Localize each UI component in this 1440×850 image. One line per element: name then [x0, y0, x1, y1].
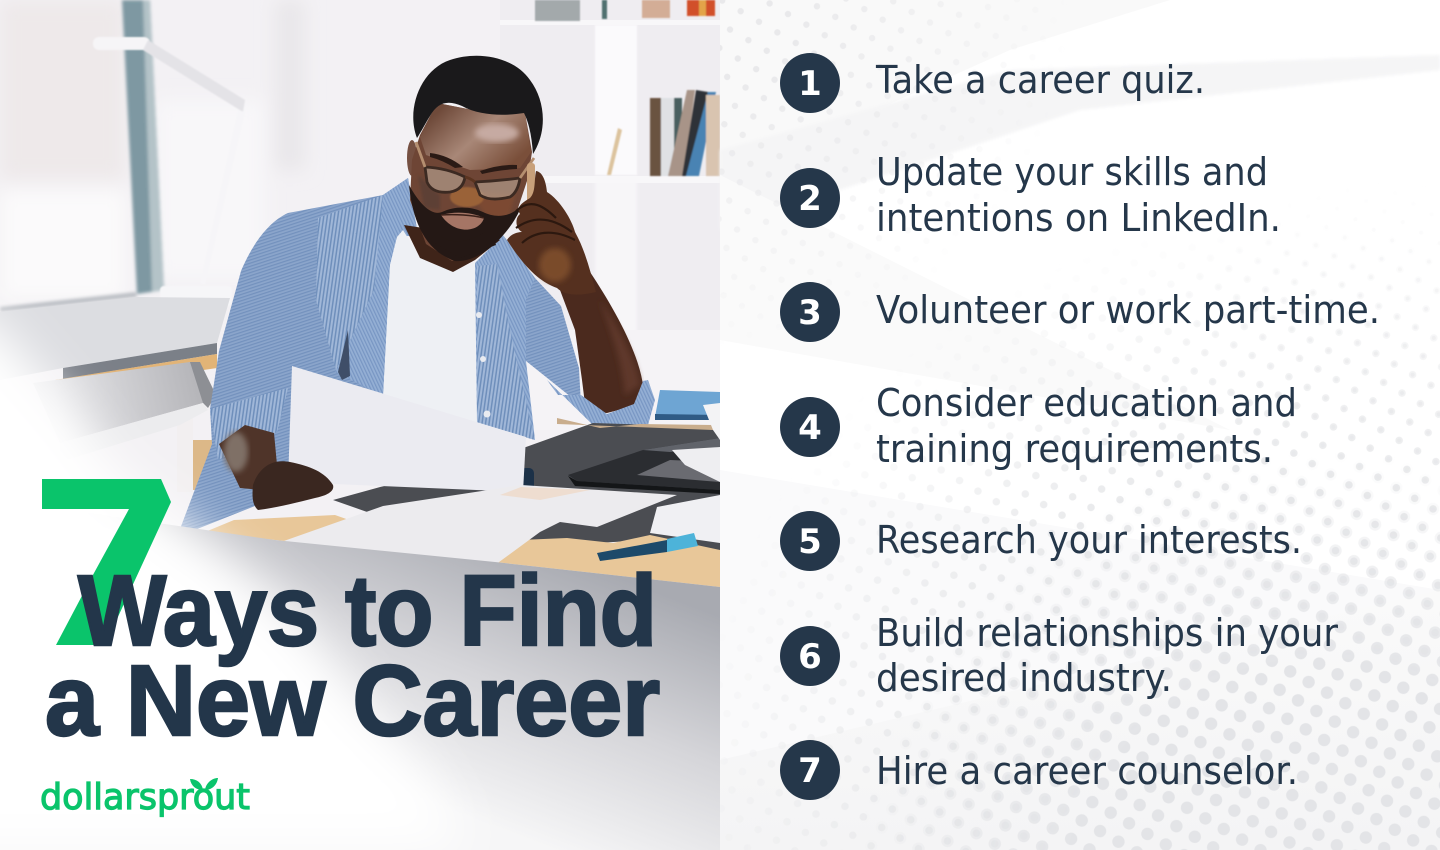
step 1	[780, 53, 1205, 113]
window view	[8, 8, 296, 289]
title line 2: a New Career	[45, 645, 660, 757]
left ear	[407, 140, 417, 176]
cheek	[480, 196, 514, 216]
step 4: Consider education and	[876, 381, 1297, 425]
window frame	[0, 0, 164, 312]
panel: right background	[720, 0, 1440, 850]
shirt right front	[475, 235, 535, 440]
step 4: 4	[798, 408, 822, 448]
face	[410, 103, 532, 261]
desk lamp	[93, 37, 245, 306]
step 6: desired industry.	[876, 656, 1172, 700]
step 2: Update your skills and	[876, 150, 1268, 194]
dot pattern	[720, 0, 1440, 850]
dollarsprout logo: dollarsprout	[40, 777, 250, 818]
books on top shelf	[535, 0, 715, 21]
blue folders	[557, 390, 720, 440]
t-shirt	[383, 230, 407, 394]
step 1: Take a career quiz.	[875, 58, 1205, 102]
step 2: intentions on LinkedIn.	[876, 196, 1281, 240]
under-desk floor	[0, 500, 720, 850]
step 7	[780, 740, 1298, 800]
right side paper stack	[672, 447, 720, 482]
shirt left body and sleeve	[177, 178, 418, 537]
eyebrows	[430, 153, 517, 174]
sleeve cuff	[547, 380, 655, 424]
nose	[450, 187, 484, 207]
beard	[409, 185, 522, 261]
panel: photo of man on phone at desk	[0, 0, 720, 850]
bookshelf unit	[596, 26, 636, 176]
step 5: Research your interests.	[876, 518, 1302, 562]
man	[177, 56, 655, 537]
title line 1: Ways to Find	[78, 555, 657, 667]
blueprint paper	[281, 485, 677, 565]
chair	[52, 362, 213, 490]
right sleeve	[526, 278, 581, 405]
white fade overlay	[0, 270, 470, 850]
step 4: training requirements.	[876, 427, 1273, 471]
logo leaves	[190, 778, 218, 790]
step 3	[780, 282, 1380, 342]
title	[45, 555, 660, 757]
step 6: Build relationships in your	[876, 611, 1338, 655]
pen behind paper	[523, 468, 534, 486]
step 5	[780, 511, 1302, 571]
paper stack front	[650, 495, 720, 543]
back left desk	[0, 297, 230, 380]
marker	[597, 533, 698, 561]
step 2	[780, 150, 1281, 240]
shirt buttons	[476, 312, 490, 418]
hand	[507, 171, 596, 295]
numeral 7 in green	[42, 479, 171, 645]
glasses	[416, 142, 534, 199]
step 6	[780, 611, 1338, 700]
phone	[527, 163, 535, 200]
shirt dark gap	[338, 330, 350, 380]
left forearm	[219, 425, 277, 490]
right forearm	[557, 272, 643, 413]
held paper	[288, 366, 526, 492]
laptop	[568, 438, 720, 494]
step 7: 7	[798, 751, 822, 791]
step 4	[780, 381, 1297, 471]
step 1: 1	[798, 64, 822, 104]
dark desk top	[333, 423, 720, 560]
step 6: 6	[798, 637, 822, 677]
step 3: Volunteer or work part-time.	[876, 288, 1380, 332]
books on middle shelf	[650, 90, 720, 176]
step 7: Hire a career counselor.	[876, 749, 1298, 793]
inner shirt stripes	[316, 195, 383, 370]
neck	[404, 225, 500, 272]
step 2: 2	[798, 179, 822, 219]
step 3: 3	[798, 293, 822, 333]
wood desk edge	[205, 515, 720, 587]
mouth	[441, 213, 484, 230]
hair	[413, 56, 543, 154]
left hand	[253, 461, 333, 510]
step 5: 5	[798, 522, 822, 562]
